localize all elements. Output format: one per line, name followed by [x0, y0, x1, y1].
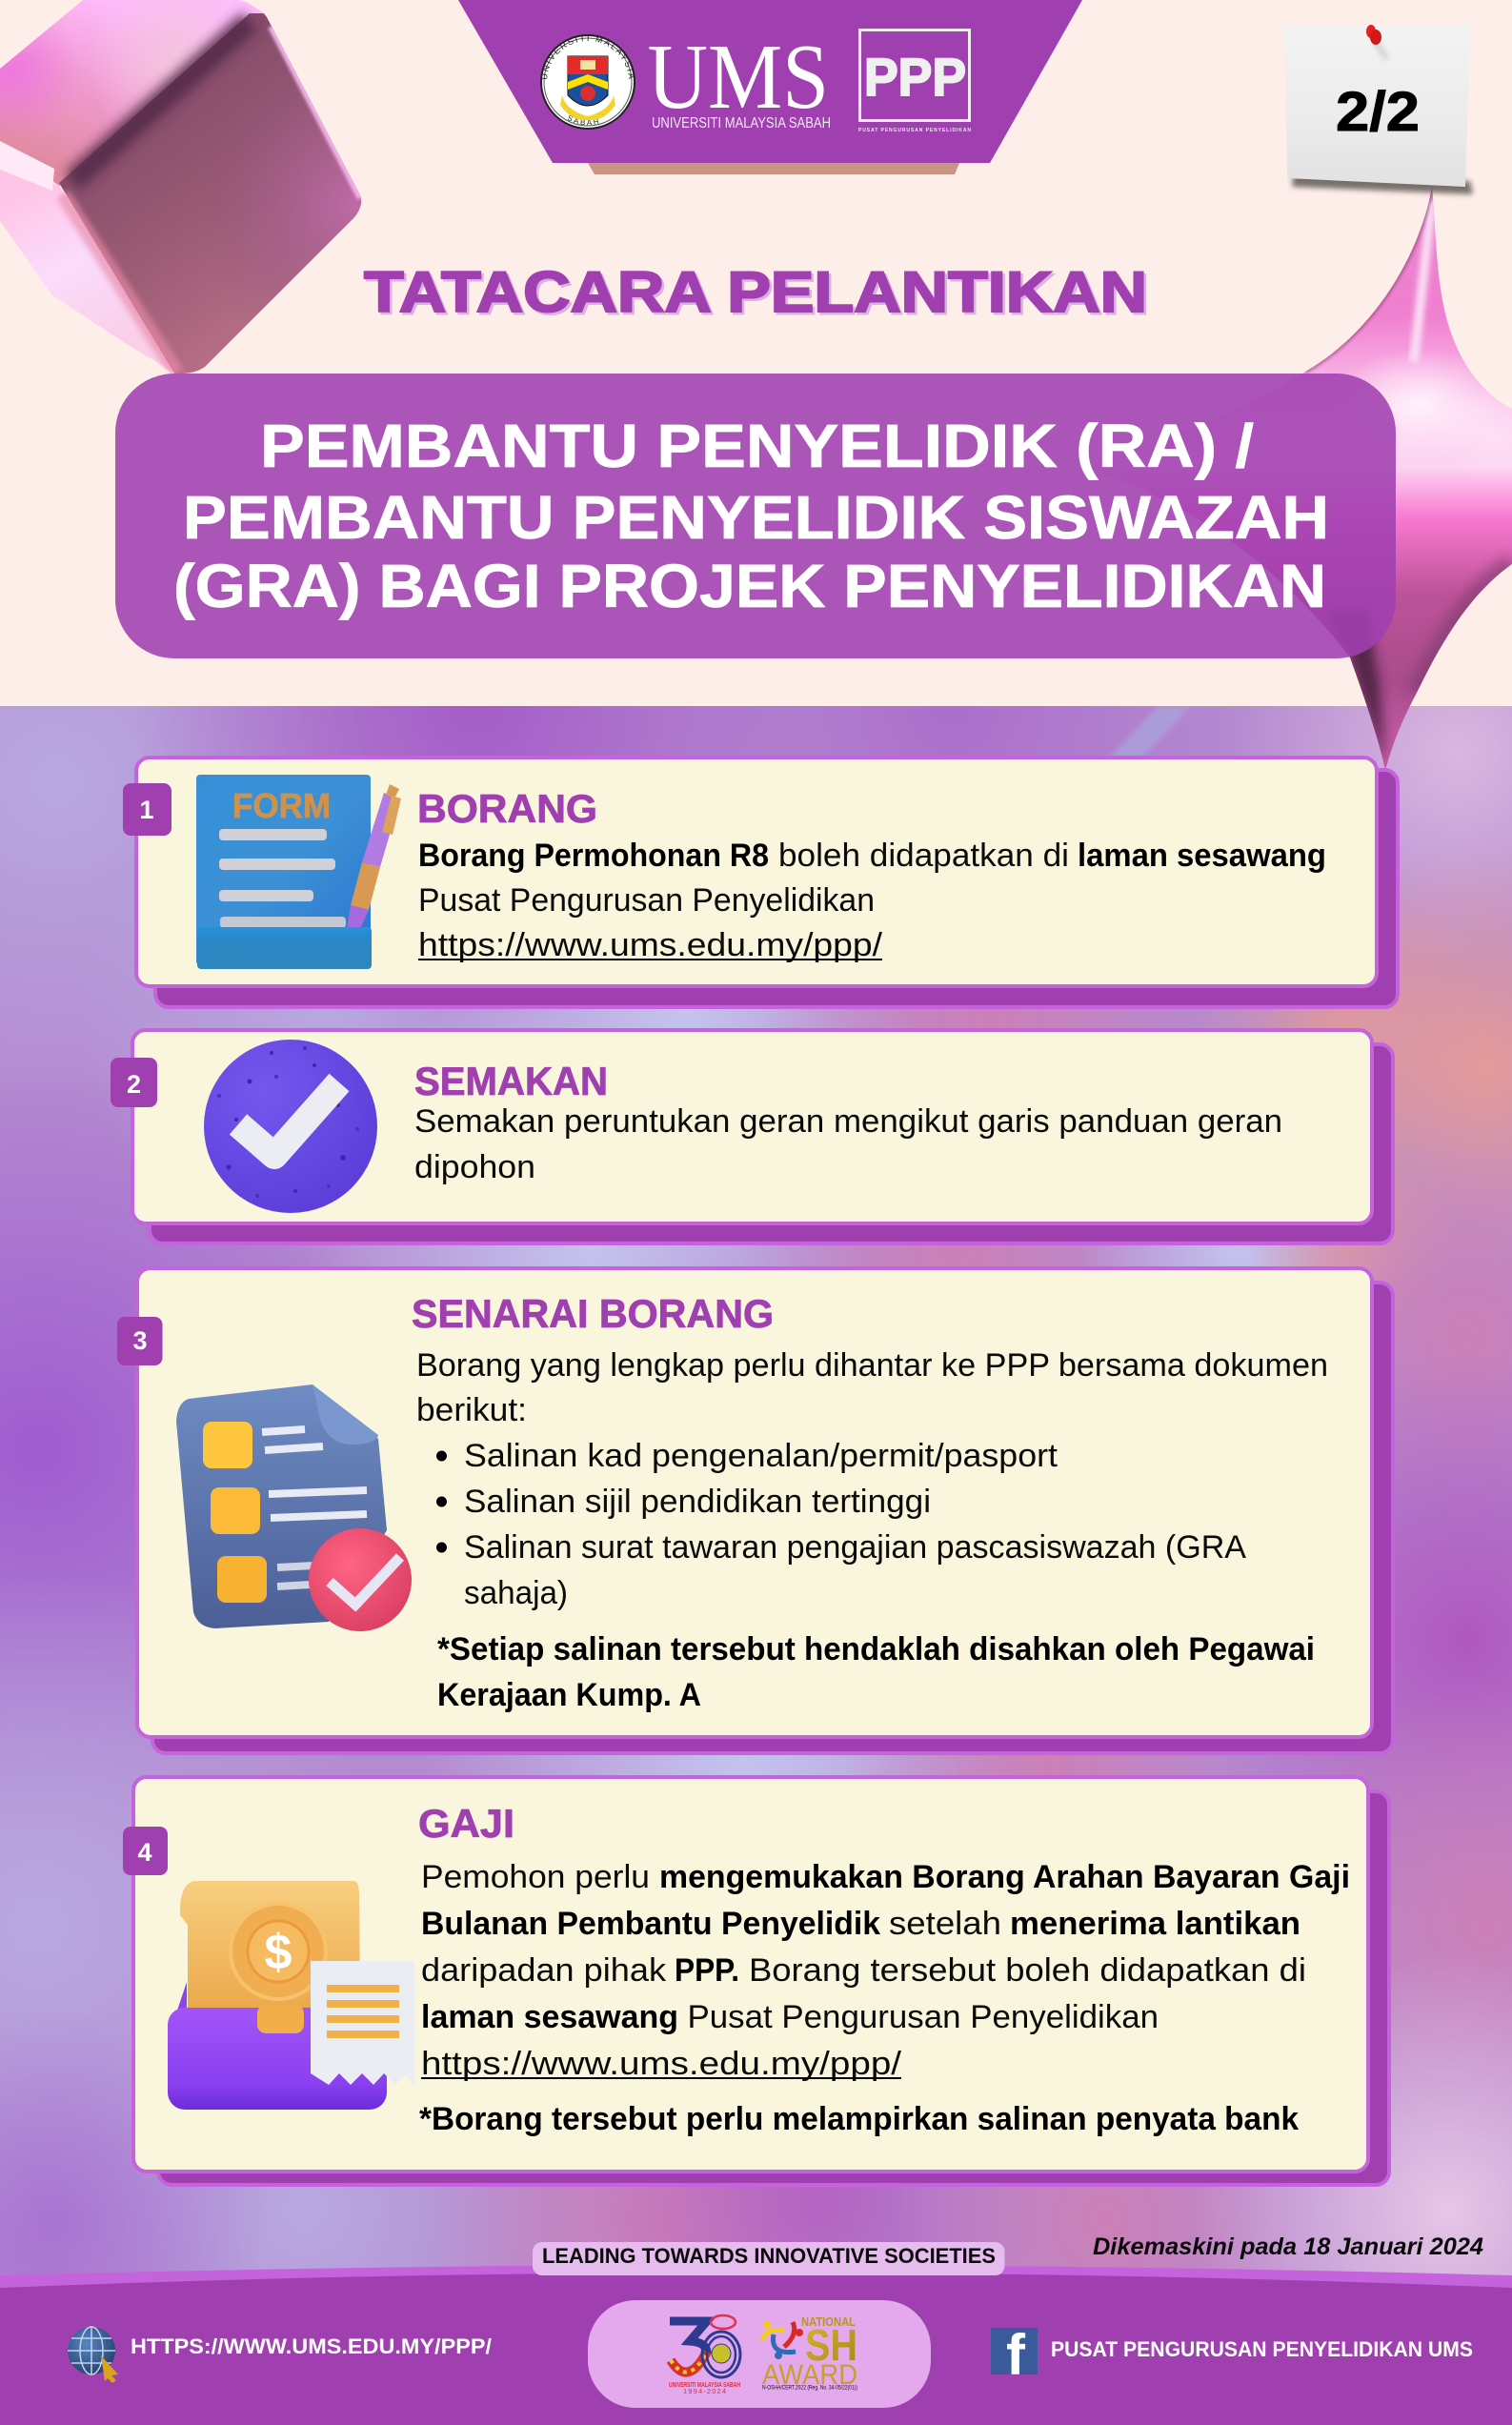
text block gaji [419, 1859, 1350, 2137]
text block senarai borang: sahaja) [464, 1575, 568, 1611]
text block borang: Pusat Pengurusan Penyelidikan [418, 882, 875, 919]
text block senarai borang: Salinan kad pengenalan/permit/pasport [464, 1438, 1058, 1474]
card 2 shadow [150, 1044, 1393, 1243]
card 4 shadow [158, 1791, 1389, 2185]
panel: award logos [588, 2300, 931, 2408]
icon: university crest: SABAH [568, 115, 598, 126]
decorative cube [0, 0, 367, 376]
icon: salary wallet: $ [265, 1925, 292, 1980]
text block borang: https://www.ums.edu.my/ppp/ [418, 927, 883, 963]
badge 1 [123, 783, 171, 836]
text block semakan: Semakan peruntukan geran mengikut garis panduan geran [414, 1103, 1282, 1140]
logo caption: UNIVERSITI MALAYSIA SABAH [652, 115, 831, 131]
facebook page text: PUSAT PENGURUSAN PENYELIDIKAN UMS [1051, 2337, 1473, 2361]
text block gaji: menerima lantikan [1010, 1906, 1300, 1942]
icon: salary wallet [168, 1881, 414, 2110]
logo PPP: PPP [864, 47, 966, 107]
panel: subtitle [115, 374, 1396, 658]
heading senarai borang: SENARAI BORANG [412, 1291, 774, 1336]
text block gaji: *Borang tersebut perlu melampirkan salinan penyata bank [419, 2101, 1299, 2137]
logo: national OSH award: SH [805, 2320, 857, 2370]
badge 2: 2 [127, 1070, 141, 1099]
card 1 shadow [155, 770, 1398, 1007]
banner: logo trapezoid [458, 0, 1082, 174]
text block gaji: setelah [889, 1906, 1001, 1942]
badge 1: 1 [139, 796, 154, 824]
title: TATACARA PELANTIKAN [364, 260, 1147, 324]
logo PPP: PUSAT PENGURUSAN PENYELIDIKAN [858, 128, 971, 133]
logo: national OSH award: N-OSHA/CERT.2022 (Reg. No. 34-05/22(01)) [762, 2386, 857, 2392]
decorative star [1149, 187, 1512, 770]
icon: facebook: f [1006, 2323, 1026, 2387]
text block senarai borang: Borang yang lengkap perlu dihantar ke PPP bersama dokumen [416, 1347, 1328, 1384]
card 2 body [132, 1030, 1372, 1223]
tagline pill [533, 2242, 1004, 2275]
badge 3 [117, 1317, 162, 1365]
update date: Dikemaskini pada 18 Januari 2024 [1093, 2233, 1483, 2260]
panel: subtitle: PEMBANTU PENYELIDIK SISWAZAH [183, 483, 1329, 552]
text block senarai borang: *Setiap salinan tersebut hendaklah disahkan oleh Pegawai [437, 1631, 1315, 1667]
logo: national OSH award: AWARD [762, 2359, 857, 2391]
footer band [0, 2265, 1512, 2425]
heading semakan: SEMAKAN [414, 1059, 608, 1103]
logo: national OSH award: NATIONAL [801, 2314, 856, 2329]
text block gaji: PPP. [675, 1952, 739, 1989]
heading borang: BORANG [417, 786, 597, 831]
text block semakan: dipohon [414, 1149, 535, 1185]
text block borang [418, 838, 1326, 963]
icon: globe with cursor [68, 2327, 118, 2383]
panel: borang [123, 758, 1398, 1007]
badge 4 [123, 1827, 168, 1875]
pinned note 2/2 [1284, 25, 1473, 194]
icon: check badge [204, 1040, 377, 1213]
website text: HTTPS://WWW.UMS.EDU.MY/PPP/ [131, 2334, 492, 2358]
text block senarai borang: Kerajaan Kump. A [437, 1677, 701, 1713]
banner tan base [588, 163, 959, 174]
panel: semakan [111, 1030, 1393, 1243]
panel: gaji [123, 1777, 1389, 2185]
icon: facebook [991, 2323, 1038, 2387]
icon: form and pen [196, 775, 401, 969]
banner purple shape [458, 0, 1082, 163]
badge 4: 4 [137, 1838, 152, 1867]
icon: university crest: UNIVERSITI MALAYSIA [542, 36, 634, 79]
gradient background section [0, 706, 1512, 2275]
panel: subtitle: PEMBANTU PENYELIDIK (RA) / [260, 412, 1254, 480]
text block semakan [414, 1103, 1282, 1185]
logo: 30 years: 1994-2024 [683, 2387, 726, 2395]
card 3 body [137, 1268, 1372, 1737]
panel: subtitle: (GRA) BAGI PROJEK PENYELIDIKAN [173, 552, 1326, 620]
text block senarai borang [416, 1347, 1328, 1713]
text block senarai borang: berikut: [416, 1392, 527, 1428]
title: TATACARA PELANTIKAN [366, 263, 1149, 326]
logo: 30 years: UNIVERSITI MALAYSIA SABAH [669, 2382, 740, 2389]
text block senarai borang: Salinan surat tawaran pengajian pascasiswazah (GRA [464, 1529, 1246, 1566]
panel: senarai borang [117, 1268, 1393, 1753]
icon: checklist document [176, 1384, 412, 1631]
text block gaji: https://www.ums.edu.my/ppp/ [421, 2046, 902, 2082]
text block gaji: Pemohon perlu [421, 1859, 650, 1895]
badge 2 [111, 1058, 157, 1107]
heading gaji: GAJI [418, 1801, 514, 1846]
text block gaji: Borang tersebut boleh didapatkan di [749, 1952, 1306, 1989]
text block gaji: daripadan pihak [421, 1952, 667, 1989]
card 1 body [136, 758, 1377, 986]
text block borang: boleh didapatkan di [778, 838, 1069, 874]
text block borang: laman sesawang [1078, 838, 1326, 874]
note label: 2/2 [1336, 81, 1420, 143]
text block gaji: laman sesawang [421, 1999, 678, 2035]
text block gaji: Bulanan Pembantu Penyelidik [421, 1906, 880, 1942]
badge 3: 3 [132, 1326, 148, 1355]
tagline pill: LEADING TOWARDS INNOVATIVE SOCIETIES [542, 2244, 996, 2268]
text block senarai borang: Salinan sijil pendidikan tertinggi [464, 1484, 931, 1520]
logo UMS: UMS [648, 26, 829, 129]
card 3 shadow [152, 1283, 1393, 1753]
icon: form and pen: FORM [232, 786, 331, 825]
text block borang: Borang Permohonan R8 [418, 838, 769, 874]
icon: red pin [1366, 25, 1387, 59]
logo: national OSH award [762, 2314, 857, 2392]
icon: university crest [540, 34, 635, 130]
logo PPP [858, 30, 971, 133]
card 4 body [133, 1777, 1368, 2172]
text block gaji: mengemukakan Borang Arahan Bayaran Gaji [659, 1859, 1350, 1895]
text block gaji: Pusat Pengurusan Penyelidikan [688, 1999, 1159, 2035]
logo: 30 years [669, 2315, 740, 2395]
